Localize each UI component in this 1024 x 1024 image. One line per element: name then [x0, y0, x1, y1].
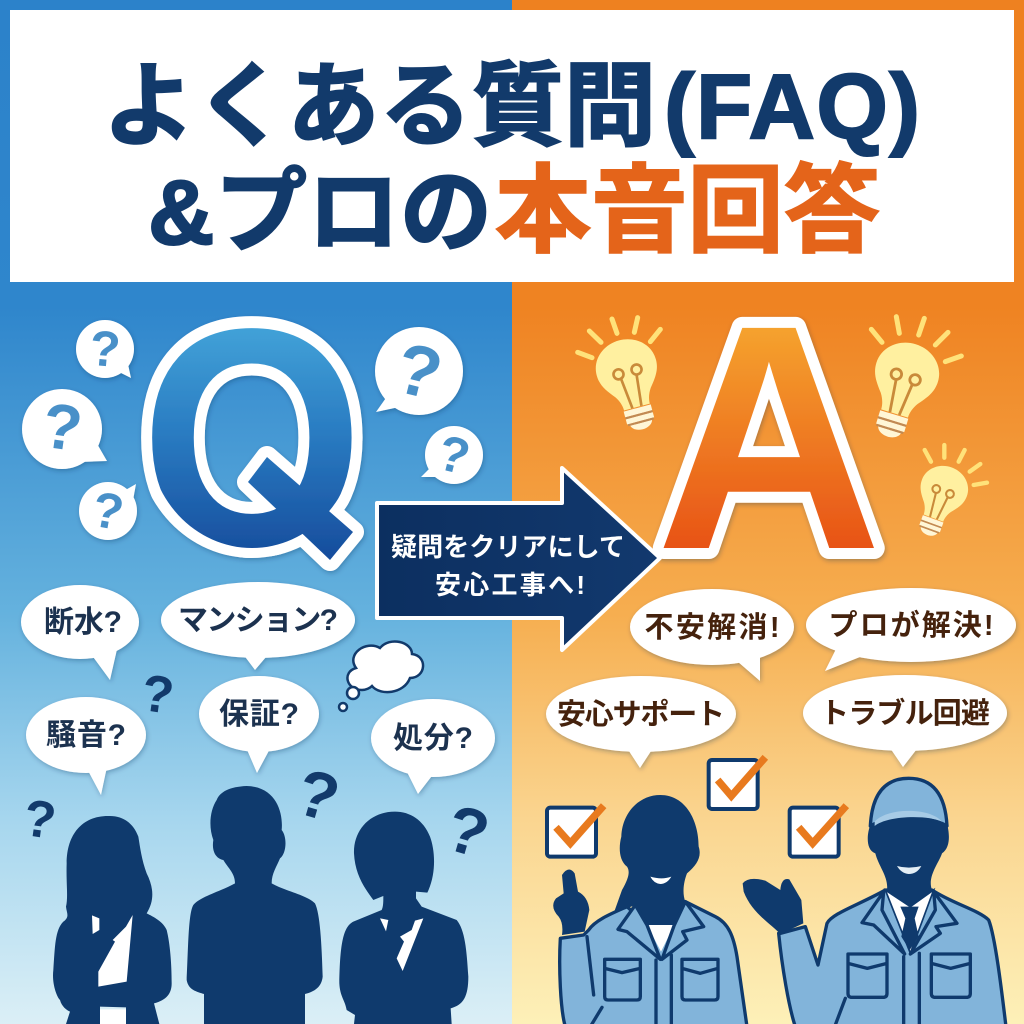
- bubble: 安心サポート: 安心サポート: [557, 698, 725, 731]
- light bulbs: [578, 317, 987, 543]
- mark 2: ?: [20, 789, 59, 851]
- arrow text: 安心工事へ!: [435, 570, 585, 600]
- hand gesturing: [743, 879, 803, 934]
- smile: [650, 877, 671, 884]
- bubble: 処分?: [371, 699, 495, 794]
- mark 1: ?: [138, 664, 177, 726]
- bulb 1: [578, 318, 672, 437]
- question bubble 1: ?: [87, 320, 123, 378]
- head: [868, 817, 949, 907]
- uniform details: [835, 953, 970, 1024]
- dark question marks: [20, 664, 497, 872]
- uniform details: [587, 937, 718, 1024]
- thought cloud: [339, 641, 423, 711]
- question bubble 5: [421, 424, 483, 486]
- bubble: 騒音?: 騒音?: [46, 719, 126, 752]
- background: answer side: [512, 0, 1024, 1024]
- shirt: [885, 890, 934, 953]
- question bubble 4: [375, 327, 463, 416]
- silhouette: woman right: [339, 812, 468, 1024]
- mark 4: ?: [438, 790, 497, 872]
- answer speech bubbles: [546, 588, 1016, 768]
- bubble: 断水?: 断水?: [44, 606, 122, 639]
- workers and check boxes: [547, 757, 1006, 1024]
- silhouette: man centre: [187, 786, 323, 1024]
- silhouette: woman left: [53, 816, 172, 1024]
- cap: [870, 778, 947, 826]
- big letter Q: Q: [140, 264, 364, 613]
- question bubble 3: [79, 481, 137, 541]
- arrow banner: [377, 468, 660, 650]
- bubble: トラブル回避: [803, 675, 1007, 767]
- bulb 3: [905, 445, 987, 543]
- checkbox 2: [709, 757, 765, 809]
- bubble: マンション?: マンション?: [178, 604, 338, 637]
- shirt: [647, 925, 674, 952]
- collar: [618, 902, 704, 959]
- bubble: 保証?: 保証?: [219, 698, 299, 731]
- bubble: プロが解決!: プロが解決!: [828, 608, 994, 642]
- bubble: 断水?: [21, 585, 139, 680]
- title line 2: &プロの: [148, 162, 492, 264]
- question bubble 2: ?: [38, 389, 87, 465]
- title panel: [10, 10, 1014, 282]
- question bubble 4: ?: [388, 328, 450, 416]
- bubble: プロが解決!: [806, 588, 1016, 671]
- uniform: [560, 902, 747, 1024]
- bubble: 処分?: 処分?: [393, 722, 473, 755]
- question bubble 5: ?: [432, 424, 476, 486]
- worker: woman: [553, 795, 747, 1024]
- question speech bubbles: [21, 582, 495, 795]
- silhouettes: customers: [53, 786, 468, 1024]
- bubble: 不安解消!: [630, 589, 794, 681]
- worker: man with cap: [743, 778, 1006, 1024]
- title line 2: 本音回答: [495, 158, 880, 265]
- question bubbles cluster: [22, 320, 483, 541]
- big letter Q: Q: [140, 264, 364, 613]
- bubble: 騒音?: [26, 697, 146, 795]
- bulb 2: [857, 317, 961, 446]
- checkbox 3: [790, 806, 846, 857]
- checkbox 1: [547, 806, 604, 857]
- title line 1: よくある質問: [103, 56, 656, 158]
- question bubble 1: [76, 320, 134, 378]
- smile: [897, 866, 921, 874]
- question bubble 2: [22, 389, 107, 469]
- hand pointing: [553, 870, 589, 935]
- background: question side: [0, 0, 512, 1024]
- bubble: 不安解消!: 不安解消!: [644, 611, 780, 644]
- big letter A: A: [656, 259, 882, 617]
- bubble: トラブル回避: トラブル回避: [820, 696, 990, 730]
- arrow text: 疑問をクリアにして: [391, 532, 625, 562]
- collar: [862, 892, 957, 954]
- uniform: [779, 890, 1006, 1024]
- tie: [900, 907, 919, 950]
- mark 3: ?: [288, 754, 348, 836]
- head and hair: [614, 795, 700, 925]
- bubble: 安心サポート: [546, 676, 736, 768]
- bubble: マンション?: [161, 582, 355, 670]
- title line 1: (FAQ): [664, 56, 920, 158]
- bubble: 保証?: [199, 676, 319, 773]
- question bubble 3: ?: [88, 481, 128, 541]
- cap visor: [875, 811, 942, 826]
